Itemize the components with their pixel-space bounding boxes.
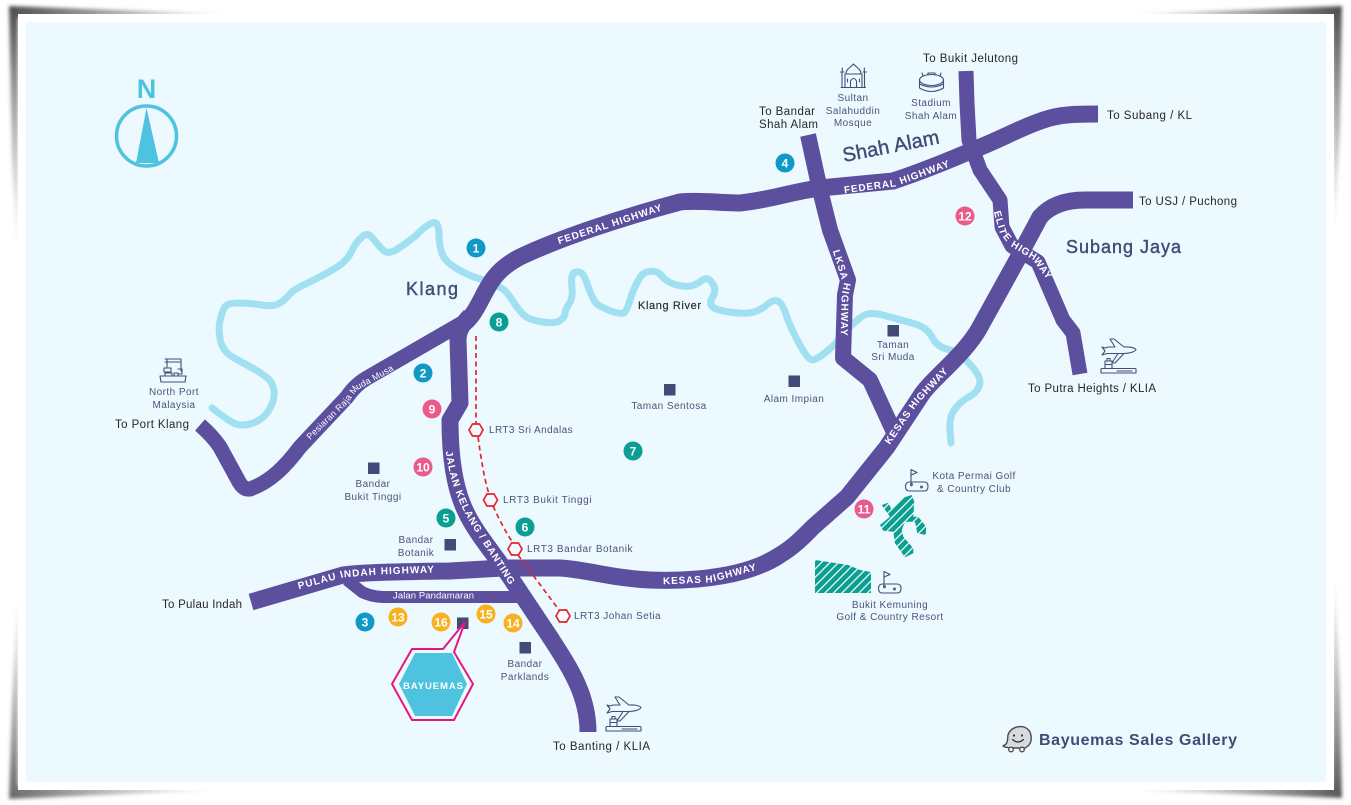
road: Jalan Kelang Banting — [450, 316, 588, 732]
road: Jalan Pandamaran — [347, 580, 520, 597]
icon: stadium — [920, 73, 944, 92]
place labels: Sri Muda — [871, 352, 915, 363]
place labels: Alam Impian — [764, 394, 824, 405]
place labels: Bandar — [508, 659, 543, 670]
place labels: Botanik — [398, 548, 435, 559]
place labels — [149, 93, 1016, 683]
road labels: JALAN KELANG / BANTING — [446, 451, 514, 584]
icon: mosque — [840, 64, 866, 88]
destination labels: To Bukit Jelutong — [923, 53, 1018, 65]
numbered markers: 1 — [473, 241, 480, 255]
road labels: PULAU INDAH HIGHWAY — [298, 566, 434, 590]
road labels: ELITE HIGHWAY — [994, 210, 1052, 278]
numbered markers: 5 — [443, 511, 450, 525]
place labels: Bukit Kemuning — [852, 600, 928, 611]
road labels: FEDERAL HIGHWAY — [558, 204, 660, 244]
numbered markers: 3 — [362, 615, 369, 629]
LRT3 stations: LRT3 Sri Andalas — [489, 425, 573, 436]
numbered markers: 2 — [420, 366, 427, 380]
numbered markers: 12 — [958, 209, 972, 223]
icon: golf Bukit Kemuning — [878, 572, 901, 593]
place labels: North Port — [149, 387, 199, 398]
LRT3 stations — [469, 424, 661, 622]
icon: golf Kota Permai — [906, 470, 928, 491]
numbered markers: 10 — [416, 460, 430, 474]
place labels: Taman — [877, 340, 909, 351]
destination labels — [115, 53, 1237, 753]
numbered markers: 14 — [506, 616, 520, 630]
destination labels: To USJ / Puchong — [1139, 196, 1237, 208]
sales gallery label: Bayuemas Sales Gallery — [1039, 732, 1237, 749]
place labels: Parklands — [501, 672, 549, 683]
icon: plane near Putra Heights — [1101, 339, 1136, 373]
numbered markers: 4 — [782, 156, 789, 170]
place labels: Golf & Country Resort — [836, 612, 944, 623]
place labels: Shah Alam — [905, 111, 957, 122]
road labels — [298, 160, 1052, 602]
destination labels: To Pulau Indah — [162, 599, 242, 611]
place labels: Salahuddin — [826, 106, 880, 117]
numbered markers: 13 — [391, 610, 405, 624]
numbered markers: 15 — [479, 607, 493, 621]
road labels: Pesiaran Raja Muda Musa — [306, 366, 394, 440]
Klang River — [212, 223, 980, 443]
road: Federal Highway — [462, 114, 1098, 325]
destination labels: To Subang / KL — [1107, 110, 1193, 122]
place labels: Malaysia — [152, 400, 196, 411]
destination labels: To Bandar — [759, 106, 815, 118]
road: Pulau Indah and Kesas Highway — [251, 200, 1133, 602]
LRT3 stations: LRT3 Johan Setia — [574, 611, 661, 622]
destination labels: To Putra Heights / KLIA — [1028, 383, 1156, 395]
place labels: & Country Club — [937, 484, 1011, 495]
road: LKSA Highway — [808, 135, 893, 430]
road: Elite Highway — [966, 71, 1080, 374]
icon: port crane — [160, 359, 186, 382]
numbered markers: 7 — [630, 444, 637, 458]
numbered markers — [356, 154, 974, 632]
place labels: Stadium — [911, 98, 951, 109]
area headings: Shah Alam — [841, 127, 941, 167]
destination labels: Shah Alam — [759, 119, 818, 131]
area headings — [406, 127, 1182, 299]
place labels: Kota Permai Golf — [932, 471, 1016, 482]
LRT3 stations: LRT3 Bukit Tinggi — [503, 495, 592, 506]
numbered markers: 8 — [496, 315, 503, 329]
road labels: KESAS HIGHWAY — [884, 367, 946, 444]
township square markers — [368, 325, 899, 654]
numbered markers: 9 — [429, 402, 436, 416]
roads network — [200, 71, 1133, 732]
place labels: Bandar — [356, 479, 391, 490]
road: Pesiaran Raja Muda Musa — [200, 322, 464, 489]
icon: north compass — [116, 74, 176, 166]
road labels: LKSA HIGHWAY — [833, 250, 851, 336]
place labels: Taman Sentosa — [631, 401, 707, 412]
place labels: Bukit Tinggi — [344, 492, 402, 503]
icon: Waze — [1003, 727, 1031, 752]
place labels: Bandar — [399, 535, 434, 546]
road labels: KESAS HIGHWAY — [664, 563, 755, 584]
destination labels: To Port Klang — [115, 419, 189, 431]
golf course areas — [815, 495, 926, 593]
road labels: FEDERAL HIGHWAY — [844, 160, 948, 194]
destination labels: To Banting / KLIA — [553, 741, 650, 753]
numbered markers: 11 — [858, 502, 871, 516]
area headings: Klang — [406, 279, 458, 299]
LRT3 stations: LRT3 Bandar Botanik — [527, 544, 634, 555]
place labels: Mosque — [834, 118, 872, 129]
river label: Klang River — [638, 300, 701, 312]
numbered markers: 16 — [434, 615, 448, 629]
Bayuemas callout: BAYUEMAS — [403, 681, 463, 692]
LRT3 dashed line — [476, 336, 559, 610]
Bayuemas callout — [392, 622, 473, 720]
area headings: Subang Jaya — [1066, 237, 1182, 257]
icon: north compass: N — [137, 74, 156, 104]
numbered markers: 6 — [522, 520, 529, 534]
icon: plane near Banting — [606, 697, 641, 731]
place labels: Sultan — [837, 93, 869, 104]
road labels: Jalan Pandamaran — [393, 590, 474, 602]
